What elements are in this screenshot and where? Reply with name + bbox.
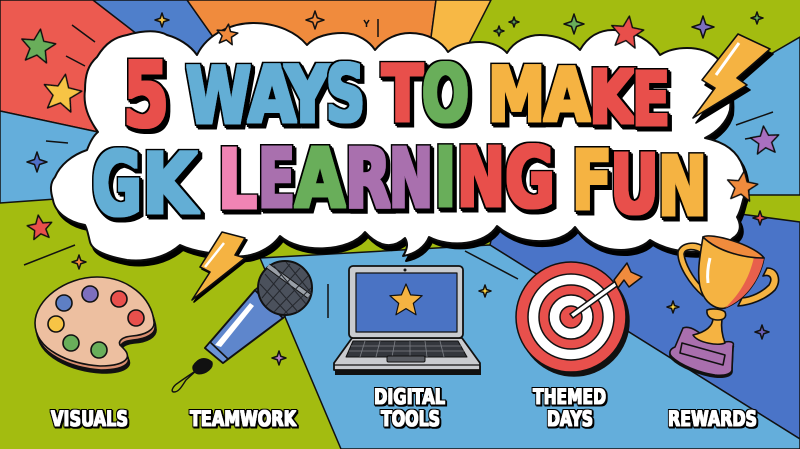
title xyxy=(92,43,707,236)
icon: paint palette xyxy=(35,277,156,373)
title: S xyxy=(326,50,365,140)
label: digital tools: DIGITAL xyxy=(374,385,445,409)
title: U xyxy=(610,138,659,233)
icon: lightning bolt top right xyxy=(693,34,770,118)
title: I xyxy=(435,131,456,226)
label: themed days xyxy=(533,385,606,431)
icon: laptop xyxy=(334,266,481,375)
title: L xyxy=(218,133,257,228)
icon: lightning bolt bottom xyxy=(192,232,245,300)
speech cloud xyxy=(51,23,746,260)
label: themed days: THEMED xyxy=(533,385,606,409)
title: N xyxy=(457,131,505,226)
labels xyxy=(51,385,757,431)
title: G xyxy=(92,133,142,236)
icon: trophy xyxy=(670,236,778,377)
title: Y xyxy=(284,51,331,141)
title: G xyxy=(505,129,555,227)
title: F xyxy=(572,134,612,229)
label: digital tools: TOOLS xyxy=(381,407,440,431)
title: K xyxy=(142,135,199,233)
title: A xyxy=(295,132,345,227)
title: K xyxy=(589,55,637,141)
title: A xyxy=(248,51,296,141)
label: digital tools xyxy=(374,385,445,431)
title: A xyxy=(544,53,590,139)
label: themed days: DAYS xyxy=(547,407,593,431)
title: E xyxy=(632,57,670,143)
title: E xyxy=(258,132,295,227)
icon: target with arrow xyxy=(516,262,642,376)
title: R xyxy=(345,132,391,227)
title: N xyxy=(389,132,433,227)
title: W xyxy=(186,52,251,142)
label: visuals: VISUALS xyxy=(51,407,128,431)
title: O xyxy=(422,50,469,140)
title: T xyxy=(382,50,423,140)
title: N xyxy=(658,140,707,235)
title: 5 xyxy=(123,43,169,148)
stars and sparkles xyxy=(19,11,780,365)
decorative burst lines xyxy=(24,19,773,318)
icon: microphone xyxy=(172,261,312,392)
title: M xyxy=(488,50,545,139)
label: teamwork: TEAMWORK xyxy=(190,407,297,431)
label: rewards: REWARDS xyxy=(668,407,757,431)
